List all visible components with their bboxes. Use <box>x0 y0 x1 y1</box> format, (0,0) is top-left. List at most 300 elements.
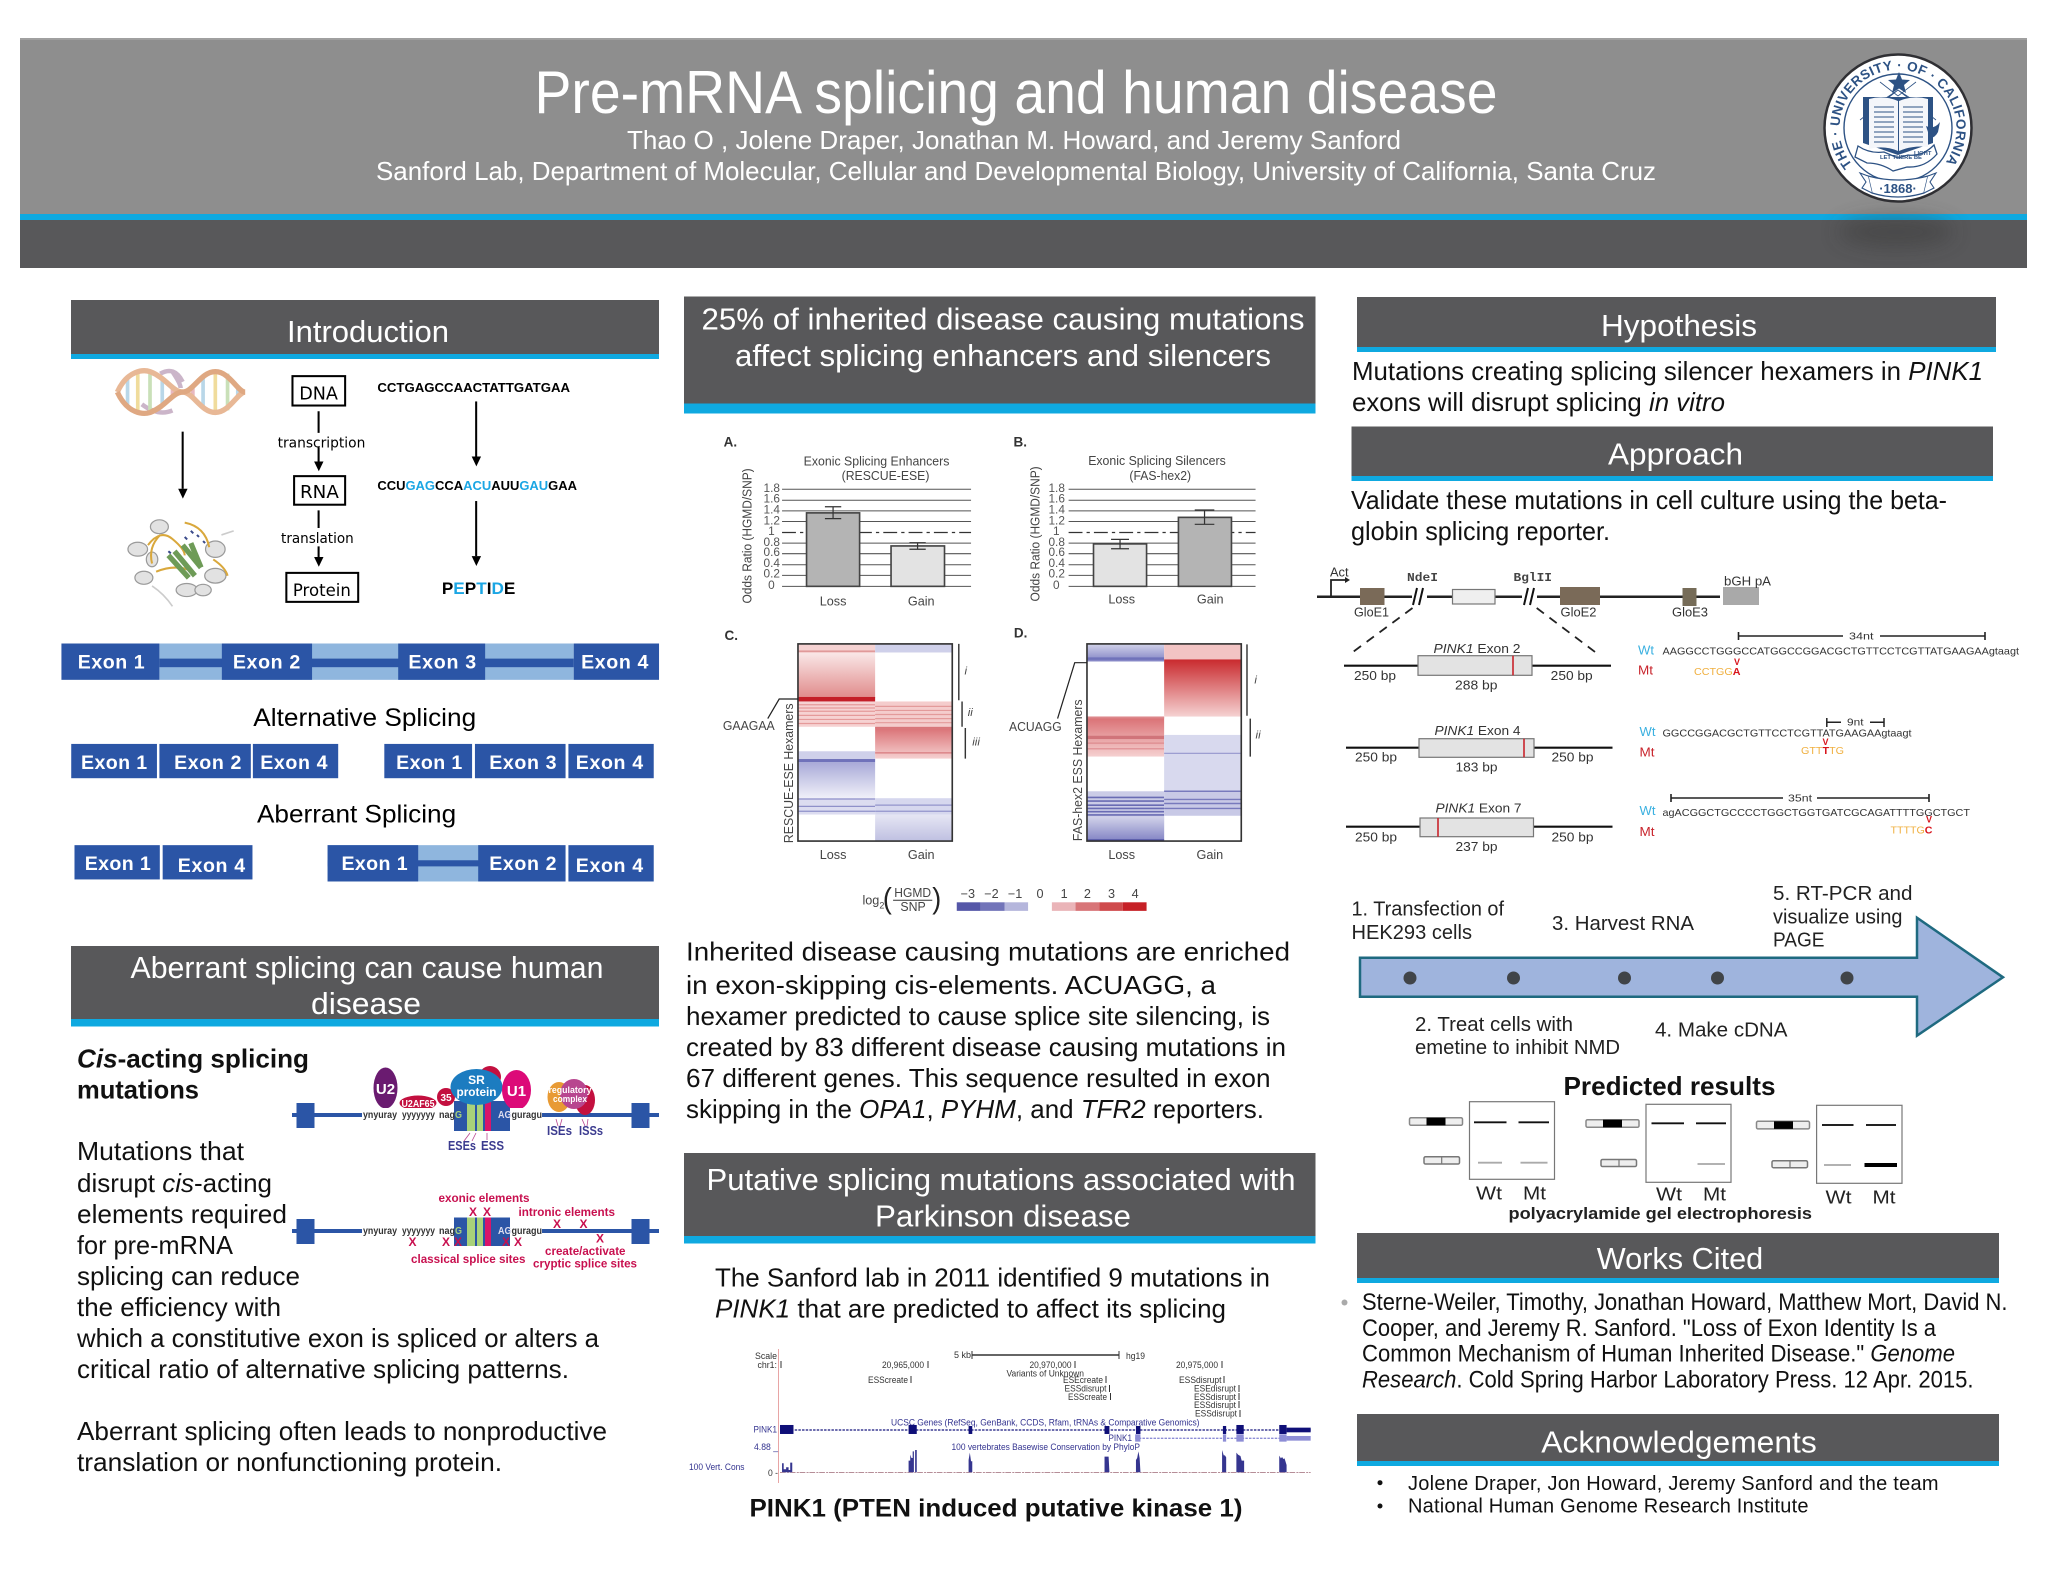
diagram: disruptive mutations: X <box>579 1217 588 1231</box>
pre-mRNA exon bar: Exon 2 <box>233 651 300 673</box>
exon 2 construct: 250 bp <box>1354 669 1396 683</box>
subheading: mutations <box>77 1074 199 1104</box>
logo shadow <box>1838 217 1954 247</box>
heading: Acknowledgements <box>1541 1424 1817 1459</box>
icon: DNA helix <box>117 371 245 413</box>
heading: alternative splicing: Alternative Splicing <box>253 704 476 732</box>
heat map D <box>1009 625 1261 862</box>
diagram: splicing reporter: GloE3 <box>1672 606 1708 620</box>
genome browser track: ESEdisrupt <box>1194 1384 1237 1394</box>
heading: Putative splicing mutations associated with <box>706 1162 1296 1197</box>
exon 4 sequence: V <box>1822 737 1829 747</box>
body text <box>715 1262 1270 1324</box>
exon 4 sequence <box>1640 718 1912 760</box>
U2AF65 <box>400 1096 436 1110</box>
genome browser track: ESSdisrupt <box>1194 1392 1237 1402</box>
subheading <box>77 1044 309 1104</box>
body text: which a constitutive exon is spliced or alters a <box>76 1323 600 1353</box>
sequence labels: nagG <box>439 1109 462 1121</box>
aberrant splicing transcripts: Exon 1 <box>85 853 151 875</box>
exon 7 sequence: Wt <box>1640 804 1656 818</box>
legend: SNP <box>900 900 926 914</box>
gel 3: Wt <box>1826 1187 1852 1207</box>
heading: disease <box>311 986 421 1021</box>
body text: created by 83 different disease causing mutations in <box>686 1032 1286 1062</box>
chart A: 0.2 <box>764 566 780 580</box>
gel 2 <box>1586 1104 1731 1205</box>
regulatory complex <box>548 1079 595 1115</box>
arrow: translation <box>281 510 354 567</box>
chart B: 0 <box>1053 578 1060 592</box>
exon 4 construct <box>1346 724 1612 775</box>
exon 4 construct: 250 bp <box>1355 751 1397 765</box>
genome browser track: 5 kb <box>954 1350 971 1360</box>
body text: disrupt cis-acting <box>77 1168 272 1198</box>
panel: introduction <box>61 300 659 881</box>
heat map C: C. <box>724 628 738 643</box>
U2: U2 <box>376 1081 395 1098</box>
body text: the efficiency with <box>77 1292 281 1322</box>
heat map D: ii <box>1256 730 1261 742</box>
chart A: 0.4 <box>764 556 780 570</box>
diagram: cis-acting elements <box>292 1066 659 1153</box>
icon: university seal <box>1823 53 1973 203</box>
gel 3: Mt <box>1872 1187 1896 1207</box>
legend <box>862 882 1147 915</box>
heading <box>684 296 1316 414</box>
chart B: 1 <box>1053 524 1060 538</box>
heading <box>1352 426 1993 481</box>
chart A: Exonic Splicing Enhancers <box>804 455 949 469</box>
element labels: ISEs <box>547 1124 572 1138</box>
icon: university seal: LIGHT <box>1914 151 1932 157</box>
exon 7 construct: PINK1 Exon 7 <box>1436 801 1522 815</box>
heat map D: i <box>1254 675 1257 687</box>
chart A: 1.8 <box>764 481 780 495</box>
genome browser track: chr1: <box>757 1360 777 1370</box>
exon 7 sequence: TTTTGC <box>1890 824 1933 836</box>
aberrant splicing transcripts: Exon 4 <box>576 855 643 877</box>
diagram: splicing reporter: BglII <box>1514 572 1552 585</box>
pre-mRNA exon bar: Exon 4 <box>581 651 649 673</box>
heat map D: D. <box>1014 625 1027 640</box>
exon 7 construct: 250 bp <box>1355 831 1397 845</box>
heading <box>1357 297 1996 352</box>
chart B: 0.2 <box>1048 566 1065 580</box>
heat map C: i <box>965 666 968 678</box>
exon 2 construct <box>1344 642 1611 692</box>
affiliation: Sanford Lab, Department of Molecular, Cellular and Developmental Biology, University of California, Santa Cruz <box>376 156 1656 186</box>
panel: inherited disease mutations <box>684 296 1316 1124</box>
body text: Mutations that <box>77 1136 245 1166</box>
alternative splicing transcripts: Exon 2 <box>174 752 242 774</box>
heading: Parkinson disease <box>875 1198 1131 1234</box>
body text: 67 different genes. This sequence resulted in exon <box>686 1063 1270 1093</box>
chart B <box>1013 434 1256 606</box>
heading: Hypothesis <box>1601 308 1757 343</box>
aberrant splicing transcripts: Exon 4 <box>178 855 245 877</box>
RNA box: RNA <box>300 482 340 503</box>
diagram: disruptive mutations: exonic elements <box>438 1191 530 1205</box>
arrow <box>180 432 185 489</box>
diagram: splicing reporter <box>1317 566 2019 854</box>
arrow <box>472 501 481 566</box>
RNA box <box>294 476 345 505</box>
genome browser track: PINK1 <box>754 1424 777 1436</box>
heading <box>1357 1233 1999 1283</box>
diagram: disruptive mutations: X <box>502 1235 510 1249</box>
genome browser track: 4.88 _ <box>754 1442 779 1453</box>
exon 2 sequence: AAGGCCTGGGCCATGGCCGGACGCTGTTCCTCGTTATGAAGAAgtaagt <box>1662 645 2019 657</box>
timeline step labels: HEK293 cells <box>1352 922 1472 944</box>
DNA box: DNA <box>299 383 339 404</box>
sequence labels <box>362 1108 542 1121</box>
timeline step labels <box>1352 883 1912 1059</box>
diagram: disruptive mutations: X <box>483 1205 491 1219</box>
timeline step labels: emetine to inhibit NMD <box>1415 1037 1620 1059</box>
panel: acknowledgements <box>1357 1414 1999 1518</box>
body text: skipping in the OPA1, PYHM, and TFR2 reporters. <box>686 1094 1264 1124</box>
alternative splicing transcripts: Exon 1 <box>81 752 147 774</box>
arrow: transcription: transcription <box>278 436 365 452</box>
timeline step labels: 5. RT-PCR and <box>1773 883 1912 905</box>
chart B: 1.4 <box>1048 502 1065 516</box>
timeline step labels: 2. Treat cells with <box>1415 1014 1573 1036</box>
genome browser track: 20,965,000 <box>882 1360 924 1370</box>
pre-mRNA exon bar: Exon 3 <box>408 651 476 673</box>
chart A: 1.6 <box>764 492 780 506</box>
heading <box>684 1153 1316 1244</box>
SR protein <box>450 1069 502 1105</box>
alternative splicing transcripts <box>71 744 654 778</box>
genome browser track: ESScreate <box>868 1375 908 1385</box>
exon 2 sequence: CCTGGA <box>1694 666 1741 678</box>
text: globin splicing reporter. <box>1351 516 1610 546</box>
exon 7 construct: 250 bp <box>1552 831 1594 845</box>
text: Mutations creating splicing silencer hexamers in PINK1 <box>1352 356 1983 386</box>
legend: 0 <box>1037 887 1044 901</box>
exon 4 sequence: Wt <box>1640 725 1656 739</box>
icon: university seal: ·1868· <box>1879 181 1917 196</box>
legend: −3 <box>961 887 975 901</box>
alternative splicing transcripts: Exon 1 <box>396 752 462 774</box>
diagram: splicing reporter: GloE1 <box>1354 606 1389 620</box>
chart A: 1 <box>768 524 775 538</box>
chart B: B. <box>1013 434 1027 449</box>
splicing diagrams <box>61 644 659 881</box>
arrow: experimental timeline <box>1360 918 2003 1036</box>
exon 7 construct: 237 bp <box>1456 840 1498 854</box>
chart B: 0.4 <box>1048 556 1065 570</box>
genome browser track: ESSdisrupt <box>1195 1408 1238 1418</box>
chart A: 1.4 <box>764 502 780 516</box>
exon 7 sequence: Mt <box>1640 825 1655 839</box>
chart B: 1.8 <box>1048 481 1065 495</box>
genome browser track: hg19 <box>1126 1351 1145 1361</box>
central dogma diagram <box>117 371 578 606</box>
Protein box: Protein <box>293 581 351 601</box>
acknowledgement list: National Human Genome Research Institute <box>1408 1496 1808 1518</box>
gel 3 <box>1756 1105 1902 1207</box>
diagram: disruptive mutations: X <box>408 1235 417 1249</box>
citation: Cooper, and Jeremy R. Sanford. "Loss of Exon Identity Is a <box>1362 1315 1937 1342</box>
heading <box>1357 1414 1999 1466</box>
aberrant splicing transcripts: Exon 2 <box>489 853 557 875</box>
header banner <box>20 38 2027 268</box>
diagram: disruptive mutations: AGguragu <box>498 1225 542 1237</box>
panel: hypothesis <box>1352 297 1996 417</box>
genome browser track: ESSdisrupt <box>1064 1384 1107 1394</box>
diagram: disruptive mutations: create/activate <box>545 1244 626 1258</box>
chart A: 0 <box>768 578 775 592</box>
diagram: disruptive mutations: X <box>469 1205 477 1219</box>
genome browser track: ESEcreate <box>1063 1375 1103 1385</box>
diagram: disruptive mutations <box>292 1191 659 1270</box>
sequence labels: AGguragu <box>498 1109 542 1121</box>
text: exons will disrupt splicing in vitro <box>1352 387 1725 417</box>
title: Pre-mRNA splicing and human disease <box>534 59 1498 126</box>
exon 2 sequence: V <box>1734 657 1740 667</box>
exon 4 sequence: Mt <box>1640 746 1655 760</box>
heading: Aberrant splicing can cause human <box>130 950 604 985</box>
chart B: Loss <box>1108 592 1135 606</box>
heading: Approach <box>1608 436 1743 472</box>
SR protein: protein <box>456 1085 496 1099</box>
heat map D: FAS-hex2 ESS Hexamers <box>1071 699 1085 841</box>
arrow: transcription <box>278 411 365 471</box>
U1: U1 <box>507 1083 526 1100</box>
exon 4 construct: PINK1 Exon 4 <box>1434 724 1521 738</box>
diagram: splicing reporter: NdeI <box>1407 572 1438 585</box>
timeline step labels: 3. Harvest RNA <box>1552 913 1695 935</box>
exon 4 sequence: 9nt <box>1847 718 1864 729</box>
chart B: Exonic Splicing Silencers <box>1088 454 1226 468</box>
exon 2 construct: 288 bp <box>1455 678 1498 692</box>
heat map D: ACUAGG <box>1009 720 1062 734</box>
exon 4 construct: 250 bp <box>1552 751 1594 765</box>
exon 2 sequence: 34nt <box>1849 630 1874 642</box>
chart A: (RESCUE-ESE) <box>842 469 929 483</box>
text <box>1351 485 1947 546</box>
legend: HGMD <box>894 886 931 900</box>
genome browser track <box>689 1349 1311 1483</box>
aberrant splicing transcripts <box>74 845 654 881</box>
chart B: Odds Ratio (HGMD/SNP) <box>1029 466 1043 601</box>
heat map C: Loss <box>820 848 846 862</box>
diagram: disruptive mutations: ynyuray <box>363 1225 397 1237</box>
body text: The Sanford lab in 2011 identified 9 mutations in <box>715 1262 1270 1292</box>
heat map C: iii <box>972 737 980 749</box>
gel 2: Wt <box>1656 1185 1682 1205</box>
element labels: ESS <box>481 1139 504 1153</box>
legend: 4 <box>1132 887 1139 901</box>
body text: elements required <box>77 1199 287 1229</box>
pre-mRNA exon bar: Exon 1 <box>78 651 145 673</box>
exon 7 sequence: agACGGCTGCCCCTGGCTGGTGATCGCAGATTTTGGCTGCT <box>1662 807 1971 819</box>
sequence labels: ynyuray <box>363 1109 397 1121</box>
heat map C <box>723 628 980 862</box>
body text: critical ratio of alternative splicing patterns. <box>77 1354 569 1384</box>
genome browser track: 20,970,000 <box>1030 1360 1072 1370</box>
chart A: 0.8 <box>764 535 780 549</box>
diagram: disruptive mutations: intronic elements <box>518 1205 615 1219</box>
diagram: splicing reporter: GloE2 <box>1560 606 1597 620</box>
diagram: disruptive mutations: classical splice sites <box>411 1252 526 1266</box>
text: Validate these mutations in cell culture using the beta- <box>1351 485 1947 515</box>
diagram: disruptive mutations: X <box>596 1232 604 1246</box>
genome browser track: ESSdisrupt <box>1194 1400 1237 1410</box>
RNA sequence: CCUGAGCCAACUAUUGAUGAA <box>377 478 578 493</box>
legend: log <box>862 893 879 907</box>
genome browser track: PINK1 <box>1108 1433 1132 1444</box>
heading: Introduction: Introduction <box>287 314 449 349</box>
U2AF65: U2AF65 <box>402 1098 435 1110</box>
chart A <box>724 434 971 609</box>
regulatory complex: regulatory <box>548 1085 592 1096</box>
gel 1 <box>1410 1102 1554 1203</box>
SR protein: SR <box>468 1073 485 1087</box>
body text <box>76 1136 607 1477</box>
arrow: translation: translation <box>281 531 354 547</box>
body text: splicing can reduce <box>77 1261 300 1291</box>
acknowledgement list: Jolene Draper, Jon Howard, Jeremy Sanford and the team <box>1408 1473 1938 1495</box>
timeline step labels: 4. Make cDNA <box>1655 1020 1788 1042</box>
diagram: splicing reporter: Act <box>1330 566 1349 580</box>
exon 7 construct <box>1346 801 1612 854</box>
body text: Inherited disease causing mutations are enriched <box>686 936 1290 966</box>
U2 <box>374 1068 398 1108</box>
timeline step labels: visualize using <box>1773 906 1902 928</box>
exon 7 sequence <box>1640 793 1971 839</box>
panel: aberrant splicing can cause human disease <box>71 946 659 1477</box>
acknowledgement list <box>1378 1473 1938 1518</box>
heat map C: ii <box>968 707 973 719</box>
exon 4 sequence: GTTTTG <box>1801 745 1844 757</box>
panel: works cited <box>1342 1233 2008 1393</box>
heading: Works Cited <box>1597 1241 1763 1276</box>
heat map D: Loss <box>1108 848 1135 862</box>
citation: Sterne-Weiler, Timothy, Jonathan Howard, Matthew Mort, David N. <box>1362 1289 2008 1316</box>
Protein box <box>286 573 358 602</box>
figure: odds ratios and heat maps <box>723 434 1261 915</box>
aberrant splicing transcripts: Exon 1 <box>341 853 408 875</box>
legend: ) <box>932 882 941 915</box>
citation <box>1342 1289 2008 1393</box>
chart B: Gain <box>1197 592 1224 606</box>
legend: 1 <box>1061 887 1068 901</box>
genome browser track: ESSdisrupt <box>1179 1375 1222 1385</box>
chart A: 1.2 <box>764 514 780 528</box>
genome browser track: 100 vertebrates Basewise Conservation by PhyloP <box>952 1442 1140 1453</box>
element labels: ESEs <box>448 1139 476 1153</box>
exon 7 sequence: 35nt <box>1788 793 1812 805</box>
sequence labels: yyyyyyy <box>402 1109 435 1121</box>
diagram: disruptive mutations: nagG <box>439 1225 462 1237</box>
chart A: A. <box>724 434 737 449</box>
alternative splicing transcripts: Exon 3 <box>489 752 557 774</box>
exon 4 sequence: GGCCGGACGCTGTTCCTCGTTATGAAGAAgtaagt <box>1662 728 1912 740</box>
alternative splicing transcripts: Exon 4 <box>576 752 643 774</box>
text <box>1352 356 1983 417</box>
caption: PINK1 (PTEN induced putative kinase 1) <box>750 1494 1242 1522</box>
legend: ( <box>883 882 892 915</box>
gel 1: Wt <box>1476 1183 1502 1203</box>
diagram: disruptive mutations: cryptic splice sites <box>533 1256 637 1270</box>
body text: in exon-skipping cis-elements. ACUAGG, a <box>686 970 1217 1000</box>
diagram: disruptive mutations: yyyyyyy <box>402 1225 435 1237</box>
peptide: PEPTIDE <box>442 580 515 598</box>
diagram: disruptive mutations: X <box>454 1235 462 1249</box>
35 <box>437 1088 455 1106</box>
exon 7 sequence: V <box>1926 814 1932 824</box>
exon 2 sequence: Mt <box>1638 663 1654 677</box>
genome browser track: 20,975,000 <box>1176 1360 1218 1370</box>
legend: −1 <box>1008 887 1022 901</box>
heat map C: GAAGAA <box>723 719 775 733</box>
exon 4 construct: 183 bp <box>1456 761 1498 775</box>
authors: Thao O , Jolene Draper, Jonathan M. Howard, and Jeremy Sanford <box>627 125 1401 155</box>
alternative splicing transcripts: Exon 4 <box>260 752 328 774</box>
U1 <box>502 1070 531 1110</box>
chart B: 0.8 <box>1048 535 1065 549</box>
heat map C: RESCUE-ESE Hexamers <box>782 704 796 843</box>
legend: 2 <box>879 900 884 910</box>
DNA box <box>292 376 345 406</box>
chart B: 1.6 <box>1048 492 1065 506</box>
body text: PINK1 that are predicted to affect its splicing <box>715 1294 1226 1324</box>
citation: Common Mechanism of Human Inherited Disease." Genome <box>1362 1341 1955 1368</box>
heat map D: Gain <box>1196 848 1223 862</box>
exon 2 sequence: Wt <box>1638 643 1655 657</box>
arrow <box>472 401 481 466</box>
element labels <box>448 1119 603 1153</box>
heading: affect splicing enhancers and silencers <box>735 338 1271 373</box>
DNA sequence: CCTGAGCCAACTATTGATGAA <box>377 380 571 395</box>
chart A: Loss <box>820 595 846 609</box>
icon: protein ribbon <box>128 520 234 606</box>
gel 1: Mt <box>1523 1183 1546 1203</box>
body text: translation or nonfunctioning protein. <box>77 1447 502 1477</box>
body text: hexamer predicted to cause splice site silencing, is <box>686 1001 1270 1031</box>
exon 2 construct: PINK1 Exon 2 <box>1434 642 1521 656</box>
icon: university seal: LET THERE BE <box>1880 155 1922 161</box>
pre-mRNA exon bar <box>61 644 659 680</box>
chart A: 0.6 <box>764 545 780 559</box>
caption: polyacrylamide gel electrophoresis: polyacrylamide gel electrophoresis <box>1508 1205 1812 1223</box>
genome browser track: 100 Vert. Cons <box>689 1462 745 1473</box>
heading: Introduction <box>71 300 659 359</box>
genome browser track: ESScreate <box>1068 1392 1107 1402</box>
diagram: disruptive mutations: X <box>553 1217 561 1231</box>
body text <box>686 936 1290 1124</box>
genome browser track: Scale <box>755 1351 777 1361</box>
chart B: 0.6 <box>1048 545 1065 559</box>
chart B: (FAS-hex2) <box>1129 469 1191 483</box>
diagram: disruptive mutations: X <box>442 1235 450 1249</box>
heading: predicted results: Predicted results <box>1564 1071 1776 1101</box>
timeline step labels: PAGE <box>1773 930 1824 952</box>
panel: Parkinson disease mutations <box>684 1153 1316 1522</box>
heat map C: Gain <box>908 848 935 862</box>
heading: 25% of inherited disease causing mutations <box>702 302 1304 336</box>
genome browser track: UCSC Genes (RefSeq, GenBank, CCDS, Rfam, tRNAs & Comparative Genomics) <box>891 1418 1200 1428</box>
chart A: Gain <box>908 595 935 609</box>
body text: for pre-mRNA <box>77 1230 234 1260</box>
genome browser track: Variants of Unknown <box>1006 1368 1084 1378</box>
gel 2: Mt <box>1703 1185 1726 1205</box>
exon 2 sequence <box>1638 630 2019 678</box>
genome browser track: 0 - <box>768 1468 778 1478</box>
